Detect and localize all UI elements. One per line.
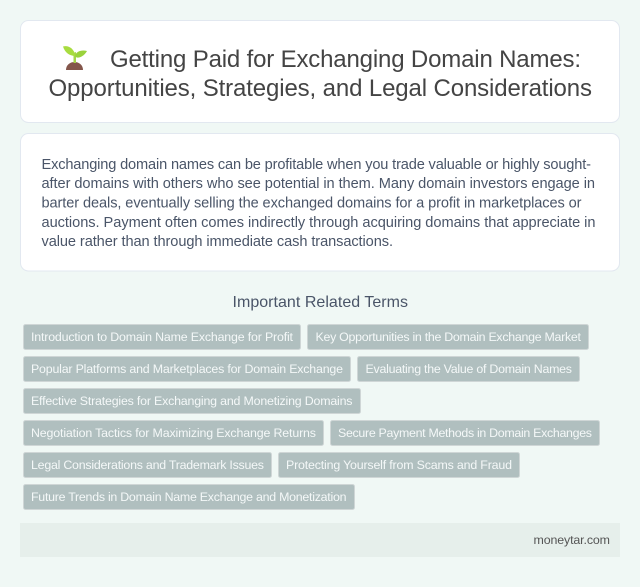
heading: title text: Opportunities, Strategies, and Legal Considerations <box>48 75 592 102</box>
chip: evaluating value: Evaluating the Value of Domain Names <box>366 362 572 376</box>
chip: strategies <box>24 388 360 414</box>
chip: key opportunities: Key Opportunities in the Domain Exchange Market <box>316 330 582 344</box>
chip: platforms: Popular Platforms and Marketplaces for Domain Exchange <box>31 362 343 376</box>
heading: important related terms: Important Related Terms <box>232 294 408 311</box>
chip: future trends: Future Trends in Domain Name Exchange and Monetization <box>31 490 347 504</box>
icon: sprout <box>63 46 87 70</box>
footer: source: moneytar.com <box>534 533 610 547</box>
text block: summary: value rather than through immediate cash transactions. <box>42 234 393 250</box>
chip: platforms <box>24 356 350 382</box>
panel: related term chips <box>24 324 600 510</box>
chip: legal: Legal Considerations and Trademark Issues <box>31 458 264 472</box>
text block: summary: Exchanging domain names can be profitable when you trade valuable or highly sought- <box>42 157 591 173</box>
chip: strategies: Effective Strategies for Exchanging and Monetizing Domains <box>31 394 352 408</box>
chip: future trends <box>24 484 354 510</box>
heading: title text: Getting Paid for Exchanging Domain Names: <box>110 46 581 73</box>
chip: key opportunities <box>308 324 588 350</box>
text block: summary: auctions. Payment often comes indirectly through acquiring domains that appreciate in <box>42 215 596 231</box>
footer <box>20 523 620 557</box>
panel: summary paragraph <box>20 134 620 271</box>
panel: title <box>20 20 620 122</box>
chip: negotiation: Negotiation Tactics for Maximizing Exchange Returns <box>31 426 316 440</box>
chip: payment <box>330 420 600 446</box>
chip: evaluating value <box>358 356 580 382</box>
chip: negotiation <box>24 420 324 446</box>
chip: introduction <box>24 324 300 350</box>
chip: scams <box>278 452 520 478</box>
chip: scams: Protecting Yourself from Scams and Fraud <box>286 458 512 472</box>
chip: legal <box>24 452 272 478</box>
text block: summary: barter deals, eventually selling the exchanged domains for a profit in marketplaces or <box>42 196 582 212</box>
text block: summary: after domains with others who see potential in them. Many domain investors engage in <box>42 176 595 192</box>
text block: summary <box>42 157 596 250</box>
chip: introduction: Introduction to Domain Name Exchange for Profit <box>31 330 294 344</box>
chip: payment: Secure Payment Methods in Domain Exchanges <box>338 426 592 440</box>
heading: title text <box>48 46 592 102</box>
